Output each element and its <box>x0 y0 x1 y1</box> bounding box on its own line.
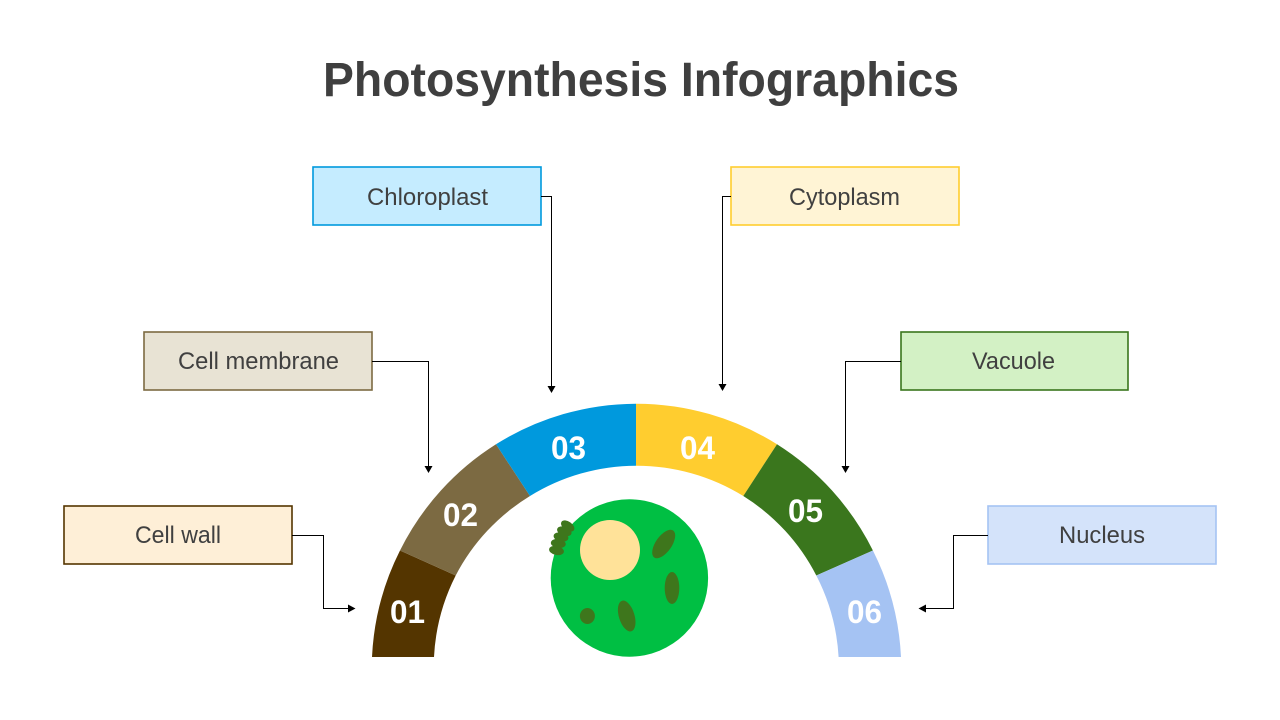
label: Vacuole <box>901 332 1128 390</box>
title: Photosynthesis Infographics <box>323 54 959 107</box>
segment 06: 06 <box>847 594 882 630</box>
segment 01: 01 <box>390 594 425 630</box>
segment 05: 05 <box>788 493 823 529</box>
segment 05 <box>743 444 873 576</box>
label: Cell membrane <box>144 332 372 390</box>
arrow: Vacuole to segment 05 <box>842 362 901 473</box>
label: Cytoplasm <box>731 167 959 225</box>
segment 03: 03 <box>551 430 586 466</box>
segment 03 <box>496 404 636 496</box>
segment 04: 04 <box>680 430 715 466</box>
label: Vacuole: Vacuole <box>972 348 1055 375</box>
label: Nucleus <box>988 506 1216 564</box>
label: Nucleus: Nucleus <box>1059 522 1145 549</box>
arrow: Cell membrane to segment 02 <box>372 362 432 473</box>
arrow: Cell wall to segment 01 <box>292 536 356 612</box>
segment 01 <box>372 550 456 657</box>
label: Cell wall: Cell wall <box>135 522 221 549</box>
segment 02: 02 <box>443 497 478 533</box>
segment 02 <box>400 444 530 576</box>
label: Chloroplast <box>313 167 541 225</box>
arrow: Cytoplasm to segment 04 <box>718 196 731 391</box>
segment 04 <box>636 404 777 496</box>
segment 06 <box>816 550 901 657</box>
arrow: Nucleus to segment 06 <box>918 536 988 612</box>
label: Cell wall <box>64 506 292 564</box>
label: Cytoplasm: Cytoplasm <box>789 184 900 211</box>
icon: plant cell <box>548 499 708 657</box>
semicircle segmented arc <box>372 404 901 657</box>
label: Cell membrane: Cell membrane <box>178 348 339 375</box>
label: Chloroplast: Chloroplast <box>367 184 488 211</box>
arrow: Chloroplast to segment 03 <box>541 196 556 393</box>
